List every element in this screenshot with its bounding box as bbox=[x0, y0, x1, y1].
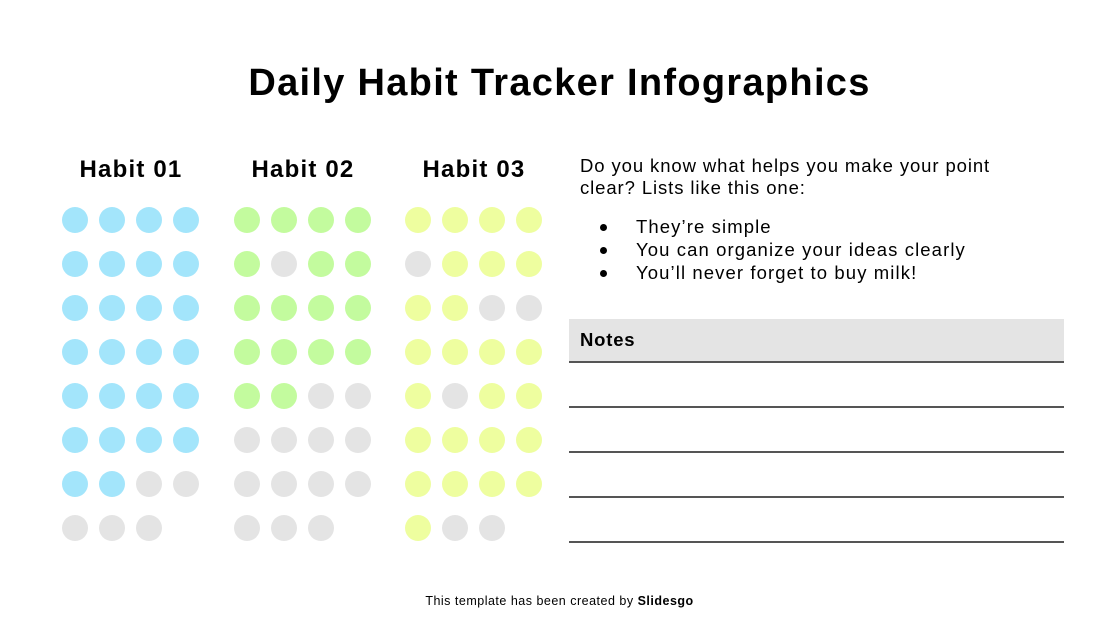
intro text: clear? Lists like this one: bbox=[580, 177, 806, 198]
footer: This template has been created by Slidesgo bbox=[425, 594, 694, 608]
bullet list: You can organize your ideas clearly bbox=[636, 239, 966, 260]
habit 03 dots bbox=[405, 207, 542, 541]
title: Daily Habit Tracker Infographics bbox=[248, 62, 871, 104]
bullet list: They’re simple bbox=[636, 216, 772, 237]
heading: habit 01: Habit 01 bbox=[80, 156, 182, 183]
heading: habit 02: Habit 02 bbox=[252, 156, 354, 183]
bullet list bbox=[600, 216, 966, 283]
heading: habit 03: Habit 03 bbox=[423, 156, 525, 183]
intro text: Do you know what helps you make your point bbox=[580, 155, 990, 176]
dot grid bbox=[62, 207, 542, 541]
notes header: Notes bbox=[580, 329, 635, 350]
habit 01 dots bbox=[62, 207, 199, 497]
habit 02 dots bbox=[234, 207, 371, 409]
bullet list: You’ll never forget to buy milk! bbox=[636, 262, 917, 283]
intro text bbox=[580, 155, 990, 198]
empty dots bbox=[62, 251, 542, 541]
notes header bbox=[569, 319, 1064, 363]
